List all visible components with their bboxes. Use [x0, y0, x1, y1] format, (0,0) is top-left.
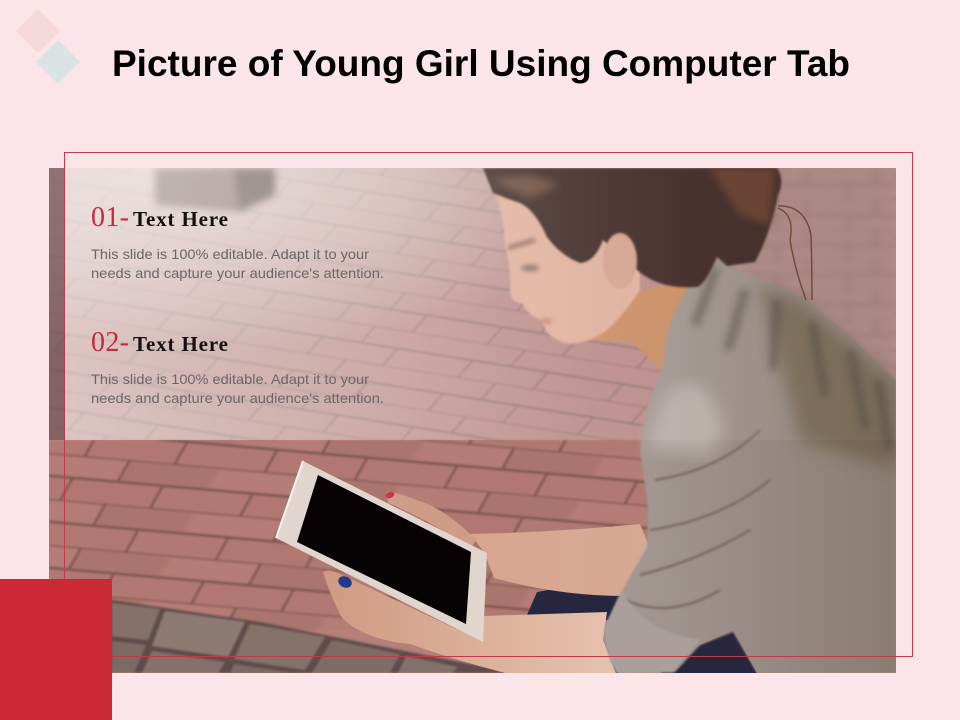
far arm — [470, 524, 650, 596]
upper hand fingers — [387, 492, 476, 550]
sweater — [605, 258, 896, 673]
photo: girl using tablet on brick pavement — [49, 168, 896, 674]
text block 02 — [91, 327, 384, 406]
loose hair strands — [778, 206, 812, 300]
text block 01: Text Here — [133, 207, 228, 231]
facial features — [508, 240, 552, 324]
cobblestones — [112, 599, 504, 673]
text block 02: Text Here — [133, 332, 228, 356]
decorative diamonds — [16, 9, 80, 84]
ear — [603, 233, 637, 289]
text block 02: 02- — [91, 327, 129, 358]
trousers — [500, 588, 757, 673]
red corner block — [0, 579, 112, 720]
text block 01: This slide is 100% editable. Adapt it to your — [91, 246, 369, 262]
text block 02: needs and capture your audience's attention. — [91, 390, 384, 406]
title: Picture of Young Girl Using Computer Tab — [112, 43, 850, 84]
text block 01: 01- — [91, 202, 129, 233]
brick pavement — [49, 168, 896, 673]
text block 01: needs and capture your audience's attention. — [91, 265, 384, 281]
tablet — [276, 461, 487, 642]
neck — [590, 280, 690, 372]
blurred background block — [155, 168, 275, 212]
text block 02: This slide is 100% editable. Adapt it to your — [91, 371, 369, 387]
thin red frame — [64, 152, 912, 656]
hair — [483, 168, 781, 287]
translucent text panel — [65, 168, 812, 440]
near arm and hand — [323, 571, 616, 673]
hair highlights — [492, 168, 775, 225]
text block 01 — [91, 202, 384, 281]
face — [496, 194, 641, 345]
nails — [336, 491, 395, 590]
